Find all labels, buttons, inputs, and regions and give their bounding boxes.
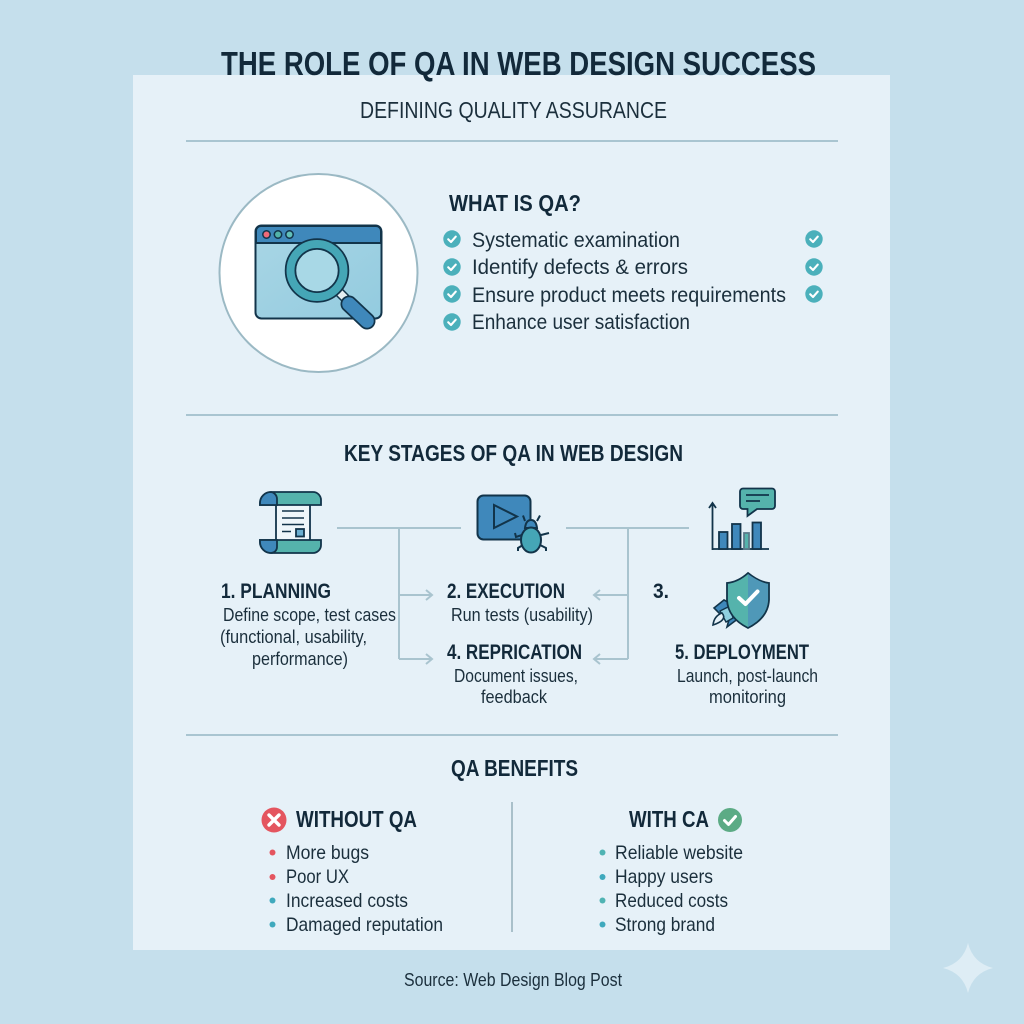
stage 5: deployment: 5. DEPLOYMENT [675,640,809,664]
stage 1: planning: performance) [252,649,348,669]
stage 4: reprication: 4. REPRICATION [447,640,582,664]
stage 1: planning: 1. PLANNING [221,579,331,603]
list: what is QA items: Systematic examination [472,228,680,252]
stage 2: execution [447,579,593,625]
column: with CA: Reliable website [615,842,743,864]
list: what is QA items: Ensure product meets requirements [472,283,786,307]
column: without QA: Damaged reputation [286,914,443,936]
column: without QA [262,806,443,936]
column: without QA: More bugs [286,842,369,864]
column: without QA: WITHOUT QA [296,806,417,832]
column: without QA: Poor UX [286,866,349,888]
stage 1: planning: Define scope, test cases [223,605,396,625]
source note: Source: Web Design Blog Post [404,970,622,990]
heading: key stages: KEY STAGES OF QA IN WEB DESIGN [344,440,683,466]
heading: QA benefits: QA BENEFITS [451,755,578,781]
heading: what is QA: WHAT IS QA? [449,190,581,216]
stage 3: number: 3. [653,579,669,603]
list: what is QA items [443,228,823,334]
icon: video and bug [478,496,549,552]
list: what is QA items: Enhance user satisfaction [472,310,690,334]
stage 4: reprication: feedback [481,687,548,707]
stage 4: reprication [447,640,582,707]
icon: shield and rocket [713,573,769,628]
column: without QA: Increased costs [286,890,408,912]
stage 2: execution: 2. EXECUTION [447,579,565,603]
title: THE ROLE OF QA IN WEB DESIGN SUCCESS [221,46,816,83]
list: what is QA items: Identify defects & errors [472,255,688,279]
stage 5: deployment [675,640,818,707]
icon: browser window with magnifying glass [220,174,418,372]
stage 1: planning [220,579,396,669]
stage 4: reprication: Document issues, [454,666,578,686]
connector: planning to execution and reprication [337,528,461,664]
stage 1: planning: (functional, usability, [220,627,367,647]
column: with CA: Strong brand [615,914,715,936]
panel: main card [133,75,890,950]
icon: sparkle watermark [943,943,993,993]
column: with CA: Happy users [615,866,713,888]
connector: execution to stages [566,528,689,664]
stage 2: execution: Run tests (usability) [451,605,593,625]
stage 5: deployment: monitoring [709,687,786,707]
column: with CA: WITH CA [629,806,709,832]
icon: bar chart with speech bubble [709,488,775,550]
icon: planning scroll [260,492,321,553]
subtitle: DEFINING QUALITY ASSURANCE [360,97,667,123]
column: with CA: Reduced costs [615,890,728,912]
column: with CA [600,806,743,936]
stage 5: deployment: Launch, post-launch [677,666,818,686]
